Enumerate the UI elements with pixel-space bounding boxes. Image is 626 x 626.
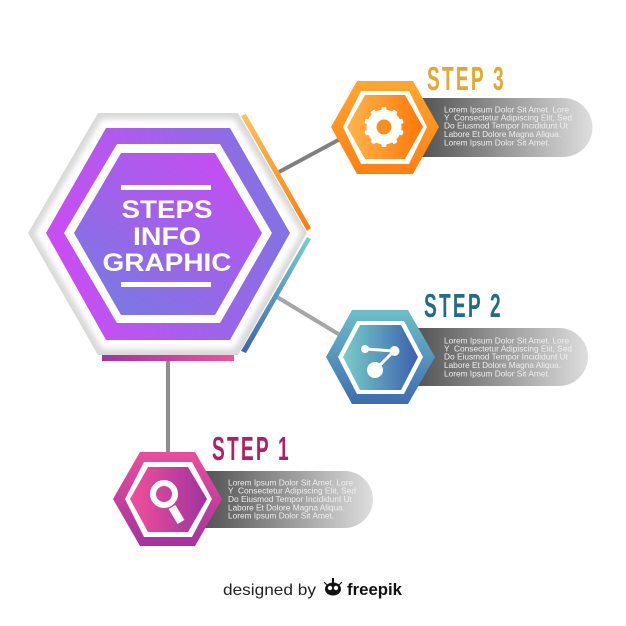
title: INFO xyxy=(133,223,201,251)
body text xyxy=(444,336,572,378)
body text: Y Consectetur Adipiscing Elit, Sed xyxy=(444,114,572,123)
body text: Lorem Ipsum Dolor Sit Amet. Lore xyxy=(228,478,354,488)
text pill xyxy=(415,98,592,157)
body text: Do Eiusmod Tempor Incididunt Ut xyxy=(444,353,569,362)
body text: Lorem Ipsum Dolor Sit Amet. Lore xyxy=(444,106,570,114)
body text: Labore Et Dolore Magna Aliqua. xyxy=(228,503,345,512)
body text xyxy=(444,106,572,147)
text pill xyxy=(200,471,373,528)
body text: Labore Et Dolore Magna Aliqua. xyxy=(444,361,561,370)
body text: Do Eiusmod Tempor Incididunt Ut xyxy=(228,495,353,504)
body text: Y Consectetur Adipiscing Elit, Sed xyxy=(228,487,356,496)
title: GRAPHIC xyxy=(102,249,232,277)
heading: STEP 3 xyxy=(427,61,506,97)
body text: Lorem Ipsum Dolor Sit Amet. Lore xyxy=(444,336,570,346)
white ring xyxy=(64,144,272,323)
panel: step 3 xyxy=(331,61,592,174)
credit text: designed by xyxy=(223,582,316,599)
top rule xyxy=(121,185,211,190)
connector: main hexagon to step 2 xyxy=(277,297,340,335)
accent bar: magenta xyxy=(102,355,234,361)
text pill xyxy=(410,328,588,386)
brand name: freepik xyxy=(347,580,403,599)
icon: gear xyxy=(364,107,404,147)
hexagon badge xyxy=(331,81,439,174)
panel: main hexagon xyxy=(28,113,311,361)
icon: magnifying glass xyxy=(153,483,181,522)
body text: Y Consectetur Adipiscing Elit, Sed xyxy=(444,345,572,354)
title xyxy=(102,196,232,277)
purple outer hexagon xyxy=(46,128,290,340)
body text: Do Eiusmod Tempor Incididunt Ut xyxy=(444,122,569,131)
body text: Lorem Ipsum Dolor Sit Amet. xyxy=(444,138,550,147)
hexagon badge xyxy=(326,310,435,404)
body text: Lorem Ipsum Dolor Sit Amet. xyxy=(444,369,550,378)
purple inner hexagon xyxy=(74,153,262,315)
heading: STEP 2 xyxy=(424,288,503,324)
panel: step 2 xyxy=(326,288,588,404)
connector: main hexagon to step 1 xyxy=(166,358,170,456)
bottom rule xyxy=(121,282,211,287)
body text: Labore Et Dolore Magna Aliqua. xyxy=(444,130,561,139)
heading: STEP 1 xyxy=(212,431,291,467)
icon: network nodes xyxy=(361,345,400,378)
body text xyxy=(228,478,356,520)
title: STEPS xyxy=(122,196,212,224)
accent bar: teal blue xyxy=(241,237,311,353)
body text: Lorem Ipsum Dolor Sit Amet. xyxy=(228,512,334,520)
white bevel frame xyxy=(28,113,307,355)
icon: freepik mascot xyxy=(324,578,342,596)
panel: step 1 xyxy=(113,431,373,546)
hexagon badge xyxy=(113,452,222,546)
accent bar: orange xyxy=(241,114,311,231)
footer: designed by freepik xyxy=(223,578,403,599)
connector: main hexagon to step 3 xyxy=(279,138,342,172)
